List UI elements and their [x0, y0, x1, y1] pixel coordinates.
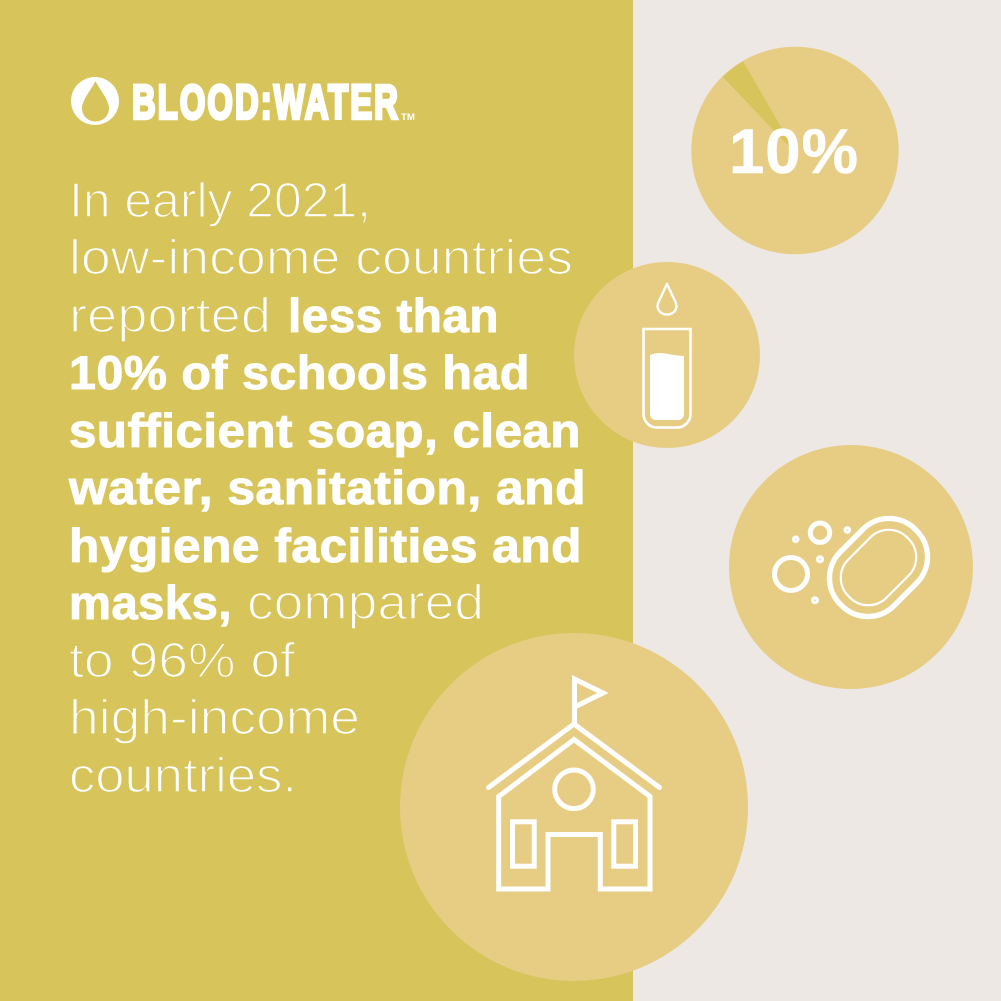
text block: main statement: less than	[288, 289, 499, 342]
house walls and door	[499, 740, 650, 889]
icon: school building	[400, 633, 748, 981]
text block: main statement: In early 2021,	[69, 174, 371, 228]
roof	[488, 724, 660, 788]
text block: main statement: countries.	[69, 749, 297, 803]
text block: main statement	[68, 174, 586, 803]
pie base circle	[691, 47, 899, 254]
text block: main statement: hygiene facilities and	[69, 519, 582, 572]
icon: logo drop in circle	[71, 77, 119, 125]
drop	[658, 284, 676, 314]
water	[650, 353, 684, 420]
bubbles	[774, 523, 850, 603]
text block: main statement: to 96% of	[69, 634, 295, 688]
text block: main statement: water, sanitation, and	[68, 461, 586, 514]
text block: main statement: high-income	[69, 691, 360, 745]
text block: main statement: low-income countries	[69, 231, 573, 285]
text block: main statement: compared	[247, 576, 484, 630]
pie wedge	[723, 62, 797, 155]
logo wordmark: BLOOD:WATER	[132, 75, 398, 129]
right window	[614, 822, 636, 866]
text block: main statement: sufficient soap, clean	[69, 404, 581, 457]
text block: main statement: reported	[69, 289, 271, 343]
soap bar	[814, 503, 943, 632]
glass outline	[644, 329, 690, 428]
text block: main statement: 10% of schools had	[69, 346, 530, 399]
pie chart: 10%	[691, 47, 899, 254]
text block: main statement: masks,	[69, 576, 232, 629]
left window	[512, 822, 534, 866]
flag	[574, 679, 603, 724]
logo: Blood:Water	[71, 75, 415, 129]
pie label: 10%	[729, 117, 859, 187]
panel: yellow left background	[0, 0, 633, 1001]
round window	[555, 770, 593, 809]
icon: soap and bubbles	[729, 445, 973, 689]
icon: water glass and drop	[574, 262, 760, 448]
trademark: TM	[401, 112, 415, 122]
